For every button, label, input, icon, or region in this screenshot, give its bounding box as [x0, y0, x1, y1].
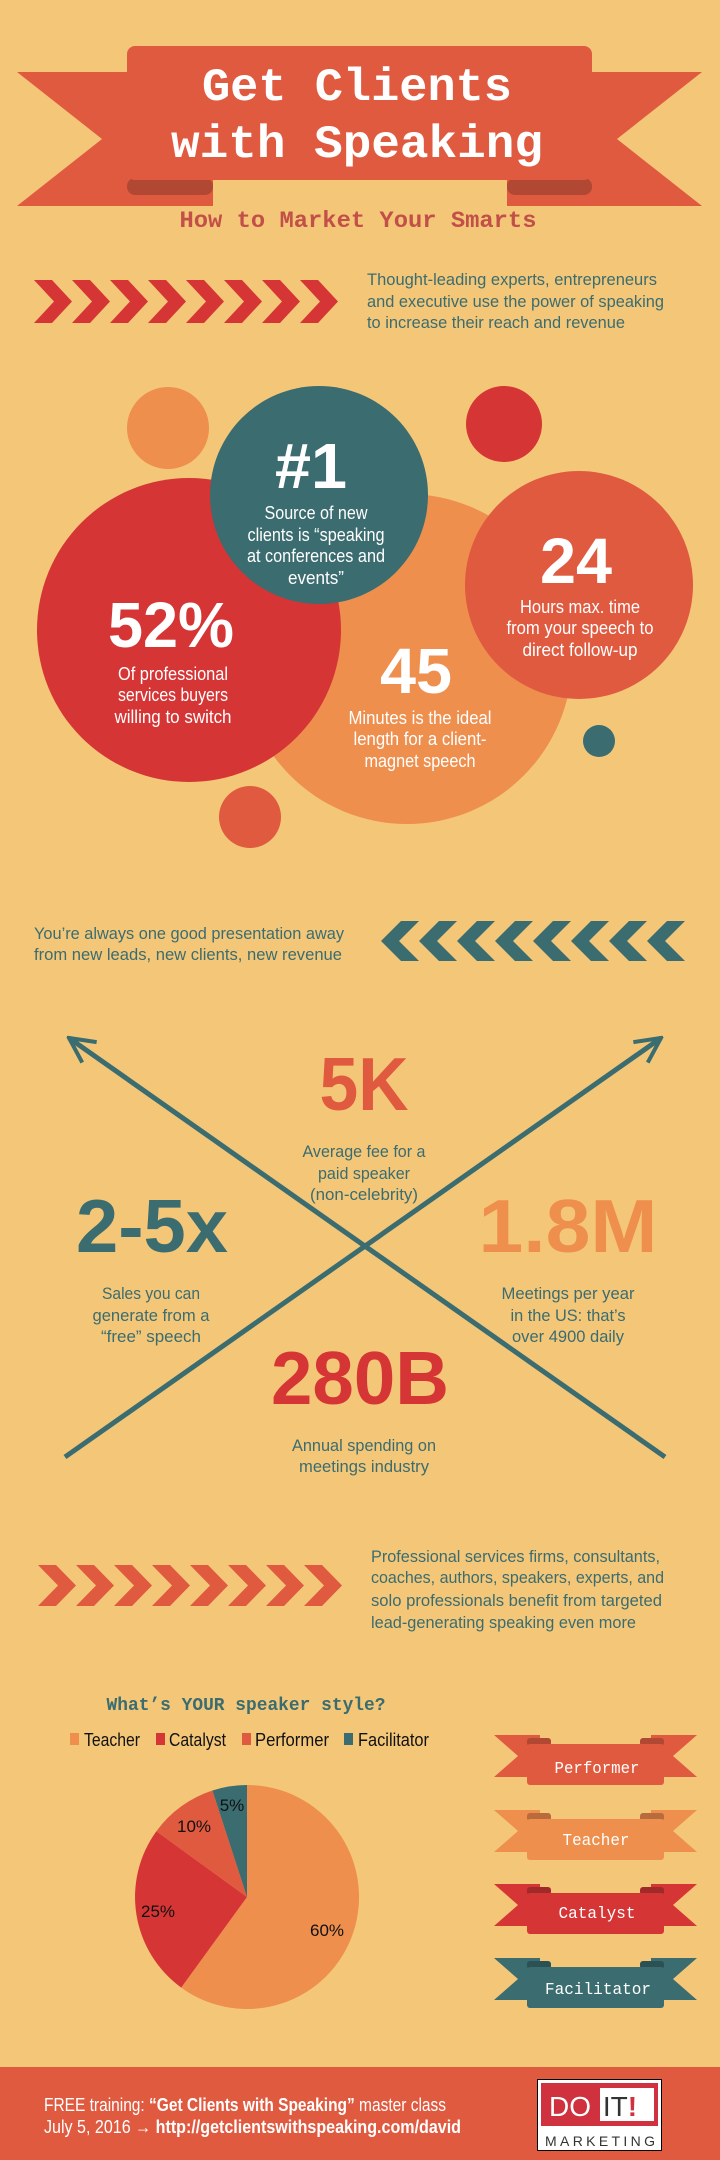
stat 280B: 280B — [271, 1336, 449, 1420]
legend: Performer — [255, 1730, 329, 1750]
presentation text — [34, 924, 344, 964]
ribbon: Teacher — [494, 1810, 697, 1860]
stat 45: 45 — [380, 635, 452, 707]
stat 1.8M: Meetings per year — [502, 1284, 635, 1303]
ribbon: Facilitator — [494, 1958, 697, 2008]
logo: MARKETING — [545, 2133, 655, 2149]
stat 24 — [506, 525, 654, 660]
professionals text — [371, 1547, 664, 1632]
ribbon: Performer — [494, 1735, 697, 1785]
presentation text: from new leads, new clients, new revenue — [34, 945, 342, 964]
stat 280B: Annual spending on — [292, 1436, 436, 1455]
pie chart: 60% — [310, 1921, 344, 1940]
stat #1: Source of new — [264, 503, 368, 523]
title text: with Speaking — [171, 119, 543, 171]
stat 24: direct follow-up — [522, 640, 638, 660]
ribbon: Facilitator: Facilitator — [545, 1981, 651, 2000]
stat 2-5x — [76, 1184, 228, 1346]
chevrons: teal left — [381, 921, 685, 961]
professionals text: solo professionals benefit from targeted — [371, 1591, 662, 1610]
chart title: What’s YOUR speaker style? — [106, 1696, 386, 1716]
legend: Catalyst — [169, 1730, 226, 1750]
pie chart: 5% — [220, 1796, 244, 1815]
footer — [0, 2067, 720, 2160]
stat 45: length for a client- — [354, 729, 487, 749]
stat 5K: (non-celebrity) — [310, 1185, 418, 1204]
legend: Facilitator — [358, 1730, 429, 1750]
ribbon: Catalyst: Catalyst — [558, 1905, 636, 1924]
stat 52%: willing to switch — [114, 707, 232, 727]
stat #1: events” — [288, 568, 344, 588]
logo: IT! — [603, 2091, 637, 2122]
title banner — [17, 46, 702, 206]
chevrons: orange right — [38, 1565, 342, 1606]
footer text: FREE training: “Get Clients with Speaking” master class — [44, 2095, 446, 2115]
stat #1: at conferences and — [247, 546, 385, 566]
legend: Teacher — [84, 1730, 140, 1750]
professionals text: coaches, authors, speakers, experts, and — [371, 1568, 664, 1587]
pie chart: 10% — [177, 1817, 211, 1836]
footer text: July 5, 2016 → http://getclientswithspeaking.com/david — [44, 2117, 461, 2137]
ribbon: Teacher: Teacher — [562, 1832, 630, 1851]
stat 280B: meetings industry — [299, 1457, 429, 1476]
professionals text: lead-generating speaking even more — [371, 1613, 636, 1632]
stat #1 — [247, 430, 385, 588]
intro text — [367, 270, 664, 332]
stat 1.8M — [478, 1184, 658, 1346]
intro text: Thought-leading experts, entrepreneurs — [367, 270, 657, 289]
stat 52%: Of professional — [118, 664, 228, 684]
stat 24: Hours max. time — [520, 597, 640, 617]
stat 5K: Average fee for a — [302, 1142, 426, 1161]
stat #1: #1 — [275, 430, 347, 502]
stat 24: from your speech to — [506, 618, 654, 638]
intro text: to increase their reach and revenue — [367, 313, 625, 332]
stat 5K: paid speaker — [318, 1164, 410, 1183]
title text — [171, 62, 543, 171]
stat 1.8M: 1.8M — [478, 1184, 658, 1268]
ribbon: Performer: Performer — [554, 1760, 640, 1779]
chevrons: red right — [34, 280, 338, 323]
stat 24: 24 — [540, 525, 612, 597]
stat 2-5x: “free” speech — [101, 1327, 201, 1346]
footer text — [44, 2095, 461, 2137]
stat 52%: services buyers — [118, 685, 228, 705]
stat 45: magnet speech — [364, 751, 476, 771]
stat 1.8M: over 4900 daily — [512, 1327, 624, 1346]
stat 1.8M: in the US: that’s — [510, 1306, 626, 1325]
pie chart — [135, 1785, 359, 2009]
logo — [538, 2080, 662, 2150]
stat 52%: 52% — [108, 589, 234, 661]
bubble chart — [37, 386, 693, 848]
stat 52% — [108, 589, 234, 727]
stat 2-5x: Sales you can — [102, 1284, 200, 1303]
stat #1: clients is “speaking — [248, 525, 384, 545]
title text: Get Clients — [202, 62, 512, 114]
legend — [70, 1730, 429, 1750]
stat 280B — [271, 1336, 449, 1476]
ribbon: Catalyst — [494, 1884, 697, 1934]
logo: DO — [549, 2091, 591, 2122]
stat 2-5x: generate from a — [92, 1306, 210, 1325]
stat 5K: 5K — [320, 1042, 408, 1126]
arrows X — [65, 1038, 665, 1457]
pie chart: 25% — [141, 1902, 175, 1921]
stat 5K — [302, 1042, 426, 1204]
stat 2-5x: 2-5x — [76, 1184, 228, 1268]
stat 45 — [348, 635, 492, 771]
intro text: and executive use the power of speaking — [367, 292, 664, 311]
presentation text: You’re always one good presentation away — [34, 924, 344, 943]
professionals text: Professional services firms, consultants, — [371, 1547, 660, 1566]
subtitle: How to Market Your Smarts — [180, 208, 536, 234]
stat 45: Minutes is the ideal — [348, 708, 492, 728]
